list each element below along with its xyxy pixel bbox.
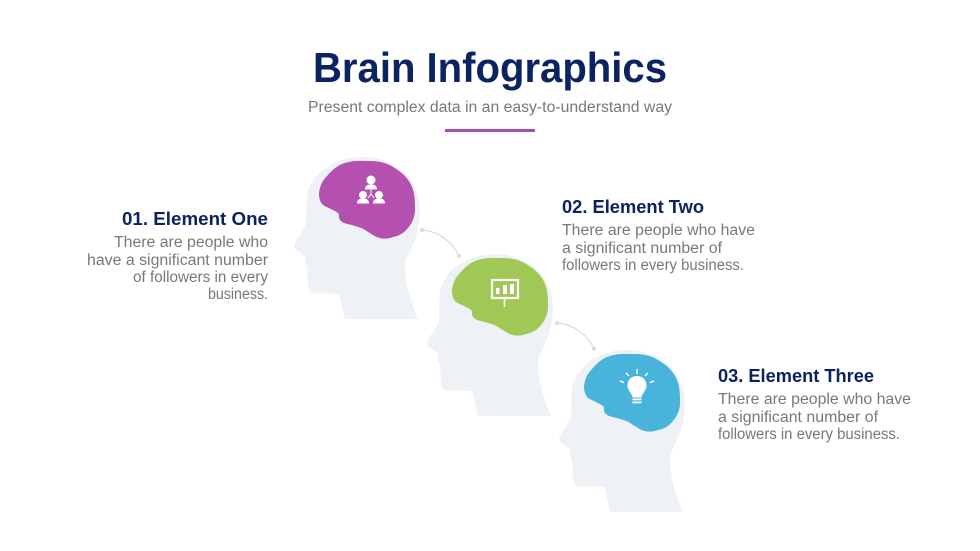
text block: element three: There are people who have [718,391,911,408]
text block: element one: business. [208,286,268,303]
text block: element two [562,196,755,274]
text block: element three: 03. Element Three [718,365,874,386]
text block: element two: followers in every business. [562,257,744,274]
text block: element one: have a significant number [87,252,268,269]
icon: people hierarchy [357,176,385,204]
text block: element three: followers in every business. [718,426,900,443]
arrow: head 2 to head 3 [556,322,596,350]
text block: element two: There are people who have [562,222,755,239]
title: Brain Infographics [313,44,667,91]
text block: element one [87,208,268,303]
head 3 with blue brain [559,350,685,512]
arrow: head 1 to head 2 [420,228,460,258]
subtitle: Present complex data in an easy-to-understand way [308,99,672,116]
title underline [445,129,535,132]
head 2 with green brain [427,254,553,416]
text block: element two: a significant number of [562,240,723,257]
head 1 with purple brain [294,157,420,319]
text block: element one: 01. Element One [122,208,268,229]
icon: presentation board [492,280,518,307]
text block: element one: of followers in every [133,269,268,286]
text block: element one: There are people who [114,234,268,251]
icon: light bulb [620,369,654,403]
text block: element two: 02. Element Two [562,196,704,217]
text block: element three: a significant number of [718,409,879,426]
text block: element three [718,365,911,443]
